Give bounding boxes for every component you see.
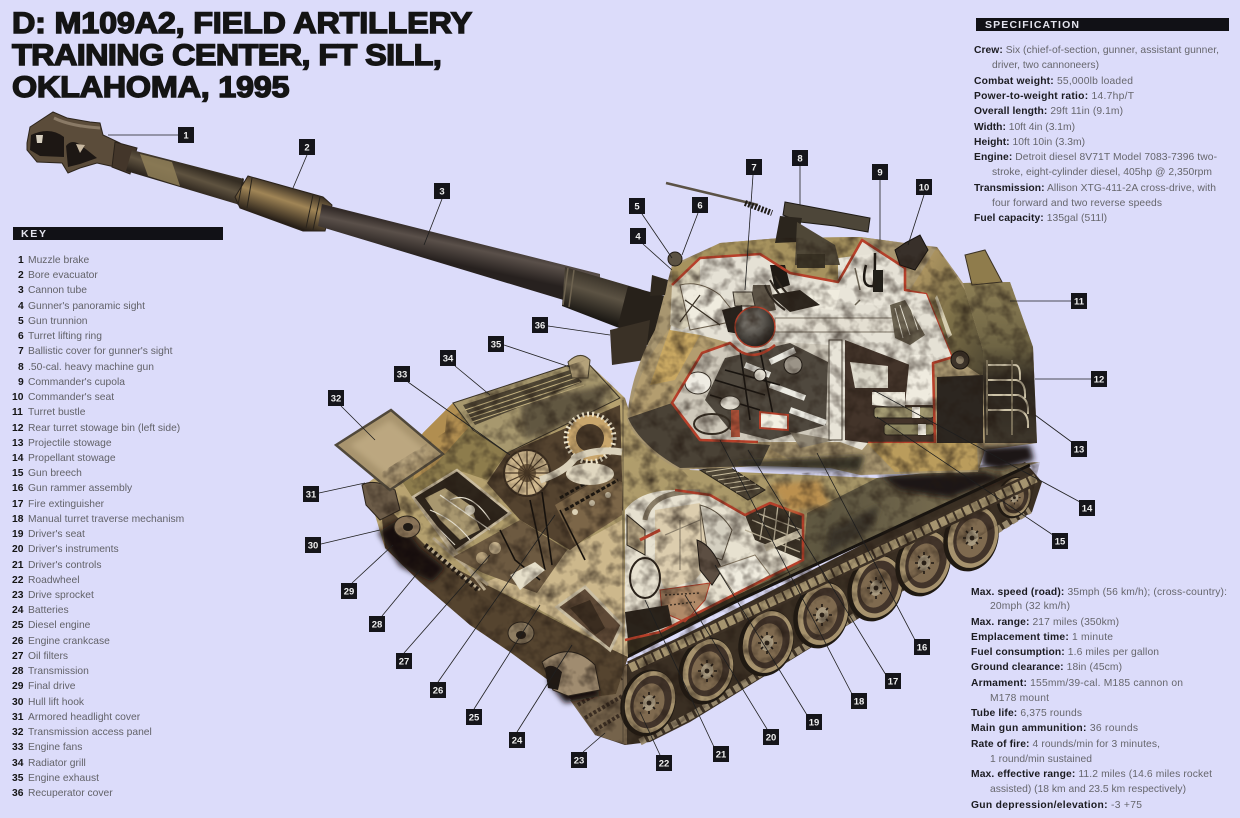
key list: 25 — [12, 620, 24, 631]
key list: 17 — [12, 499, 24, 510]
crew and dimensions text: Width: 10ft 4in (3.1m) — [974, 122, 1075, 133]
crew and dimensions text: Crew: Six (chief-of-section, gunner, assistant gunner, — [974, 45, 1219, 56]
callout 7: 7 — [751, 162, 757, 174]
callout 15: 15 — [1055, 536, 1066, 548]
callout 5: 5 — [634, 202, 640, 212]
right rear stowage panel — [845, 340, 935, 443]
commander's hatch gear — [895, 235, 928, 270]
key list: Radiator grill — [28, 758, 86, 769]
callout 25 — [466, 605, 540, 725]
white exhaust pipe — [540, 451, 622, 480]
callout 11 — [1010, 293, 1087, 309]
central column — [829, 340, 842, 440]
callout 8 — [792, 150, 808, 205]
callout 1 — [108, 127, 194, 143]
panel: specification bottom: M178 mount — [990, 693, 1049, 704]
callout 17 — [748, 450, 901, 689]
key list: 6 — [18, 331, 24, 342]
callout 24 — [509, 645, 572, 748]
tan lower plate — [867, 443, 978, 472]
turret — [627, 237, 1037, 475]
deck grille — [700, 466, 765, 500]
key list: Driver's controls — [28, 560, 102, 571]
mantlet — [618, 286, 672, 345]
crew and dimensions text: four forward and two reverse speeds — [992, 198, 1162, 209]
key list: Driver's instruments — [28, 544, 119, 555]
callout 9 — [872, 164, 888, 240]
callout 6 — [682, 197, 708, 255]
callout 16 — [817, 453, 930, 655]
crew and dimensions text: Fuel capacity: 135gal (511l) — [974, 213, 1107, 224]
callout 15 — [877, 417, 1068, 549]
key list: Ballistic cover for gunner's sight — [28, 346, 173, 357]
panel: specification bottom: Fuel consumption: 1.6 miles per gallon — [971, 647, 1159, 658]
crew and dimensions text: driver, two cannoneers) — [992, 60, 1099, 71]
key list: 10 — [12, 392, 24, 403]
callout 25: 25 — [469, 712, 480, 724]
callout 33 — [394, 366, 510, 455]
key list: 31 — [12, 712, 24, 723]
callout 23 — [571, 733, 605, 768]
callout 29 — [341, 545, 393, 599]
callout 13 — [1035, 415, 1087, 457]
key list: Engine crankcase — [28, 636, 110, 647]
projectile and propellant stowage — [874, 407, 934, 435]
steering wheel — [630, 558, 660, 598]
callout 2: 2 — [304, 142, 310, 154]
callout 27: 27 — [399, 656, 409, 668]
hull front face shadow — [380, 500, 628, 700]
recoil thick section — [562, 267, 668, 336]
key list: 27 — [12, 651, 24, 662]
gun breech tubes — [745, 350, 826, 423]
key list: Gun breech — [28, 468, 82, 479]
callout numbers and leader lines — [108, 127, 1107, 771]
stowage rack rails — [988, 365, 1028, 428]
key list: Engine exhaust — [28, 773, 99, 784]
key list: 19 — [12, 529, 24, 540]
callout 27 — [396, 555, 490, 669]
ballistic cover dome — [735, 307, 775, 347]
callout 19 — [715, 565, 822, 730]
key list: 21 — [12, 560, 24, 571]
key list: Diesel engine — [28, 620, 91, 631]
key list: 11 — [12, 407, 23, 418]
key list: Armored headlight cover — [28, 712, 141, 723]
panel: specification bottom: Tube life: 6,375 rounds — [971, 708, 1082, 719]
callout 19: 19 — [809, 718, 819, 728]
lower track run and dark gap — [595, 462, 1042, 745]
engine fan two — [566, 414, 614, 462]
crew and dimensions text: Engine: Detroit diesel 8V71T Model 7083-7396 two- — [974, 152, 1217, 163]
turret plate and bustle — [910, 247, 983, 377]
key list: 16 — [12, 483, 24, 494]
cutaway illustration: M109A2 howitzer — [27, 112, 1050, 750]
callout 9: 9 — [877, 168, 883, 178]
panel: specification top — [974, 18, 1229, 224]
title: OKLAHOMA, 1995 — [12, 70, 290, 104]
key list: Cannon tube — [28, 285, 87, 296]
panel: specification bottom: Max. range: 217 miles (350km) — [971, 617, 1119, 628]
transmission access panel — [336, 410, 443, 490]
tan rear wall — [655, 503, 712, 590]
key list: Commander's cupola — [28, 377, 125, 388]
callout 36: 36 — [535, 320, 545, 332]
key list: 34 — [12, 758, 24, 769]
specification heading bar: SPECIFICATION — [985, 19, 1079, 31]
dark interior items — [760, 290, 840, 310]
callout 20: 20 — [766, 732, 776, 744]
key list: 13 — [12, 438, 24, 449]
front turret plate — [630, 328, 790, 466]
specification heading bar — [976, 18, 1229, 31]
title: D: M109A2, FIELD ARTILLERY — [12, 6, 472, 40]
callout 28 — [369, 570, 420, 632]
commander's cupola interior — [838, 254, 905, 305]
key list: 5 — [18, 316, 24, 327]
key list: 36 — [12, 788, 24, 799]
panel: specification bottom: Armament: 155mm/39-cal. M185 cannon on — [971, 678, 1183, 689]
turret shell — [627, 237, 1037, 475]
muzzle brake — [27, 112, 120, 173]
callout 31 — [303, 483, 365, 502]
panel: specification bottom: assisted) (18 km and 23.5 km respectively) — [990, 784, 1186, 795]
front tube — [126, 150, 244, 205]
crew and dimensions text: Height: 10ft 10in (3.3m) — [974, 137, 1085, 148]
crew and dimensions text: Combat weight: 55,000lb loaded — [974, 76, 1133, 87]
roadwheels — [612, 662, 684, 744]
key list: Propellant stowage — [28, 453, 116, 464]
key list: Drive sprocket — [28, 590, 94, 601]
key list: 14 — [12, 453, 24, 464]
key list: 22 — [12, 575, 24, 586]
key list: Oil filters — [28, 651, 68, 662]
key list — [12, 255, 184, 799]
lower interior breech clutter — [672, 342, 835, 448]
suspension rails under bay — [415, 500, 488, 590]
callout 22: 22 — [659, 758, 669, 770]
key list: 20 — [12, 544, 24, 555]
recuperator cover — [610, 320, 650, 365]
batteries and boxes — [717, 555, 770, 595]
callout 23: 23 — [574, 756, 584, 766]
key list: 28 — [12, 666, 24, 677]
lower engine bay plumbing — [453, 492, 585, 593]
key list: Gun trunnion — [28, 316, 88, 327]
key list: 24 — [12, 605, 24, 616]
mottled paint texture — [360, 230, 1050, 750]
deck orange patch — [770, 480, 830, 512]
callout 24: 24 — [512, 736, 523, 746]
callout 16: 16 — [917, 642, 927, 654]
sight housing window — [670, 258, 740, 330]
key list: 15 — [12, 468, 24, 479]
callout 20 — [685, 595, 779, 745]
rear box — [965, 250, 1002, 285]
instruments — [660, 583, 710, 622]
hull — [336, 320, 1040, 742]
key list: Recuperator cover — [28, 788, 113, 799]
panel: specification bottom: Max. speed (road): 35mph (56 km/h); (cross-country): — [971, 587, 1227, 598]
radiator grill — [463, 370, 582, 425]
key list: .50-cal. heavy machine gun — [28, 362, 154, 373]
engine compartment — [487, 405, 623, 550]
driver compartment — [625, 490, 803, 640]
key list: 32 — [12, 727, 24, 738]
key list: 9 — [18, 377, 24, 388]
key list: Transmission access panel — [28, 727, 152, 738]
engine deck tan plate — [403, 403, 507, 497]
crew and dimensions text: Overall length: 29ft 11in (9.1m) — [974, 106, 1123, 117]
callout 14 — [873, 390, 1095, 516]
tracks and roadwheels — [570, 462, 1042, 745]
key list: Turret lifting ring — [28, 331, 102, 342]
key list: 26 — [12, 636, 24, 647]
key list: Driver's seat — [28, 529, 85, 540]
callout 2 — [293, 139, 315, 188]
title — [12, 6, 472, 104]
traverse handwheel — [694, 414, 730, 434]
key list: Final drive — [28, 681, 76, 692]
callout 26 — [430, 515, 555, 698]
callout 6: 6 — [697, 200, 703, 212]
bore evacuator — [235, 176, 332, 231]
red cut lines — [672, 240, 953, 443]
key list: 30 — [12, 697, 24, 708]
panel: specification bottom: 20mph (32 km/h) — [990, 601, 1070, 612]
callout 28: 28 — [372, 620, 382, 630]
callout 35 — [488, 336, 570, 367]
hull side panel — [660, 462, 1036, 638]
crew and dimensions text — [974, 45, 1219, 224]
callout 30: 30 — [308, 540, 318, 552]
cannon barrel — [27, 112, 672, 345]
engine grille bars — [745, 503, 803, 560]
key list: 1 — [18, 255, 24, 266]
key list: 33 — [12, 742, 24, 753]
key list: Bore evacuator — [28, 270, 98, 281]
callout 21 — [645, 600, 729, 762]
key list: Roadwheel — [28, 575, 80, 586]
key list: Manual turret traverse mechanism — [28, 514, 184, 525]
callout 31: 31 — [306, 490, 317, 500]
callout 35: 35 — [491, 340, 502, 350]
key list: 8 — [18, 362, 24, 373]
key list: Fire extinguisher — [28, 499, 105, 510]
panel: specification bottom: 1 round/min sustained — [990, 754, 1092, 765]
key list: Gunner's panoramic sight — [28, 301, 145, 312]
callout 14: 14 — [1082, 504, 1093, 514]
callout 3 — [424, 183, 450, 245]
callout 17: 17 — [888, 676, 898, 688]
key heading bar — [13, 227, 223, 240]
diesel engine block — [555, 475, 622, 545]
callout 13: 13 — [1074, 444, 1084, 456]
key list: Turret bustle — [28, 407, 86, 418]
key list: 23 — [12, 590, 24, 601]
callout 29: 29 — [344, 586, 354, 598]
key list: 12 — [12, 423, 24, 434]
crew and dimensions text: stroke, eight-cylinder diesel, 405hp @ 2,350rpm — [992, 167, 1212, 178]
panel: specification bottom: Emplacement time: 1 minute — [971, 632, 1113, 643]
key list: 29 — [12, 681, 24, 692]
callout 1: 1 — [183, 130, 189, 142]
gunner's sight box — [733, 292, 755, 306]
key list: Engine fans — [28, 742, 82, 753]
cannon tube rear — [318, 204, 600, 311]
callout 36 — [532, 317, 610, 335]
panel: specification bottom: Rate of fire: 4 rounds/min for 3 minutes, — [971, 739, 1160, 750]
callout 34: 34 — [443, 354, 454, 364]
engine fan — [504, 450, 550, 496]
driver's seat — [697, 540, 722, 585]
key list: Batteries — [28, 605, 69, 616]
callout 12 — [1035, 371, 1107, 387]
key list: Rear turret stowage bin (left side) — [28, 423, 180, 434]
batteries — [557, 587, 622, 650]
key list: Gun rammer assembly — [28, 483, 133, 494]
radiator deck — [453, 360, 620, 453]
key list: Hull lift hook — [28, 697, 85, 708]
callout 8: 8 — [797, 154, 803, 164]
callout 4: 4 — [635, 232, 641, 242]
rear dark stowage panel — [937, 375, 983, 443]
panel: specification bottom: Gun depression/elevation: -3 +75 — [971, 800, 1142, 811]
crew and dimensions text: Transmission: Allison XTG-411-2A cross-drive, with — [974, 183, 1216, 194]
callout 22 — [640, 712, 672, 771]
key list: 7 — [18, 346, 24, 357]
callout 10 — [908, 179, 932, 245]
panel: specification bottom: Main gun ammunition: 36 rounds — [971, 723, 1138, 734]
callout 5 — [629, 198, 672, 258]
rammer tube — [775, 318, 897, 332]
key heading bar: KEY — [21, 228, 46, 240]
crew and dimensions text: Power-to-weight ratio: 14.7hp/T — [974, 91, 1135, 102]
key list: Projectile stowage — [28, 438, 112, 449]
callout 30 — [305, 530, 380, 553]
callout 32 — [328, 390, 375, 440]
callout 18: 18 — [854, 696, 864, 708]
upper track run — [630, 478, 1036, 668]
fire extinguisher — [731, 410, 740, 437]
key list: 4 — [18, 301, 24, 312]
callout 26: 26 — [433, 686, 443, 696]
panel: key — [12, 227, 223, 799]
key list: Transmission — [28, 666, 89, 677]
key list: 3 — [18, 285, 24, 296]
front track run — [570, 665, 627, 745]
machine gun — [666, 183, 870, 268]
arch tube — [645, 492, 700, 520]
transmission bay — [413, 470, 510, 553]
bustle block — [963, 282, 1037, 443]
upper interior — [670, 240, 953, 450]
key list: 35 — [12, 773, 24, 784]
engine exhaust — [568, 355, 590, 378]
key list: Muzzle brake — [28, 255, 90, 266]
centre fold — [622, 400, 624, 742]
key list: 2 — [18, 270, 24, 281]
panel: specification bottom — [971, 587, 1227, 811]
key list: 18 — [12, 514, 24, 525]
callout 32: 32 — [331, 394, 341, 404]
callout 3: 3 — [439, 186, 445, 198]
callout 4 — [630, 228, 672, 270]
panel: specification bottom: Ground clearance: 18in (45cm) — [971, 662, 1122, 673]
title: TRAINING CENTER, FT SILL, — [12, 38, 442, 72]
callout 18 — [720, 440, 867, 709]
panel: specification bottom: Max. effective range: 11.2 miles (14.6 miles rocket — [971, 769, 1212, 780]
front lift hooks and headlights — [362, 482, 600, 696]
key list: Commander's seat — [28, 392, 114, 403]
callout 12: 12 — [1094, 374, 1104, 386]
callout 11: 11 — [1074, 296, 1085, 308]
callout 33: 33 — [397, 370, 407, 380]
lifting ring and panoramic sight — [668, 252, 682, 266]
callout 7 — [745, 159, 762, 290]
turret roof — [672, 237, 905, 285]
callout 34 — [440, 350, 490, 395]
callout 21: 21 — [716, 750, 727, 760]
callout 10: 10 — [919, 182, 929, 194]
